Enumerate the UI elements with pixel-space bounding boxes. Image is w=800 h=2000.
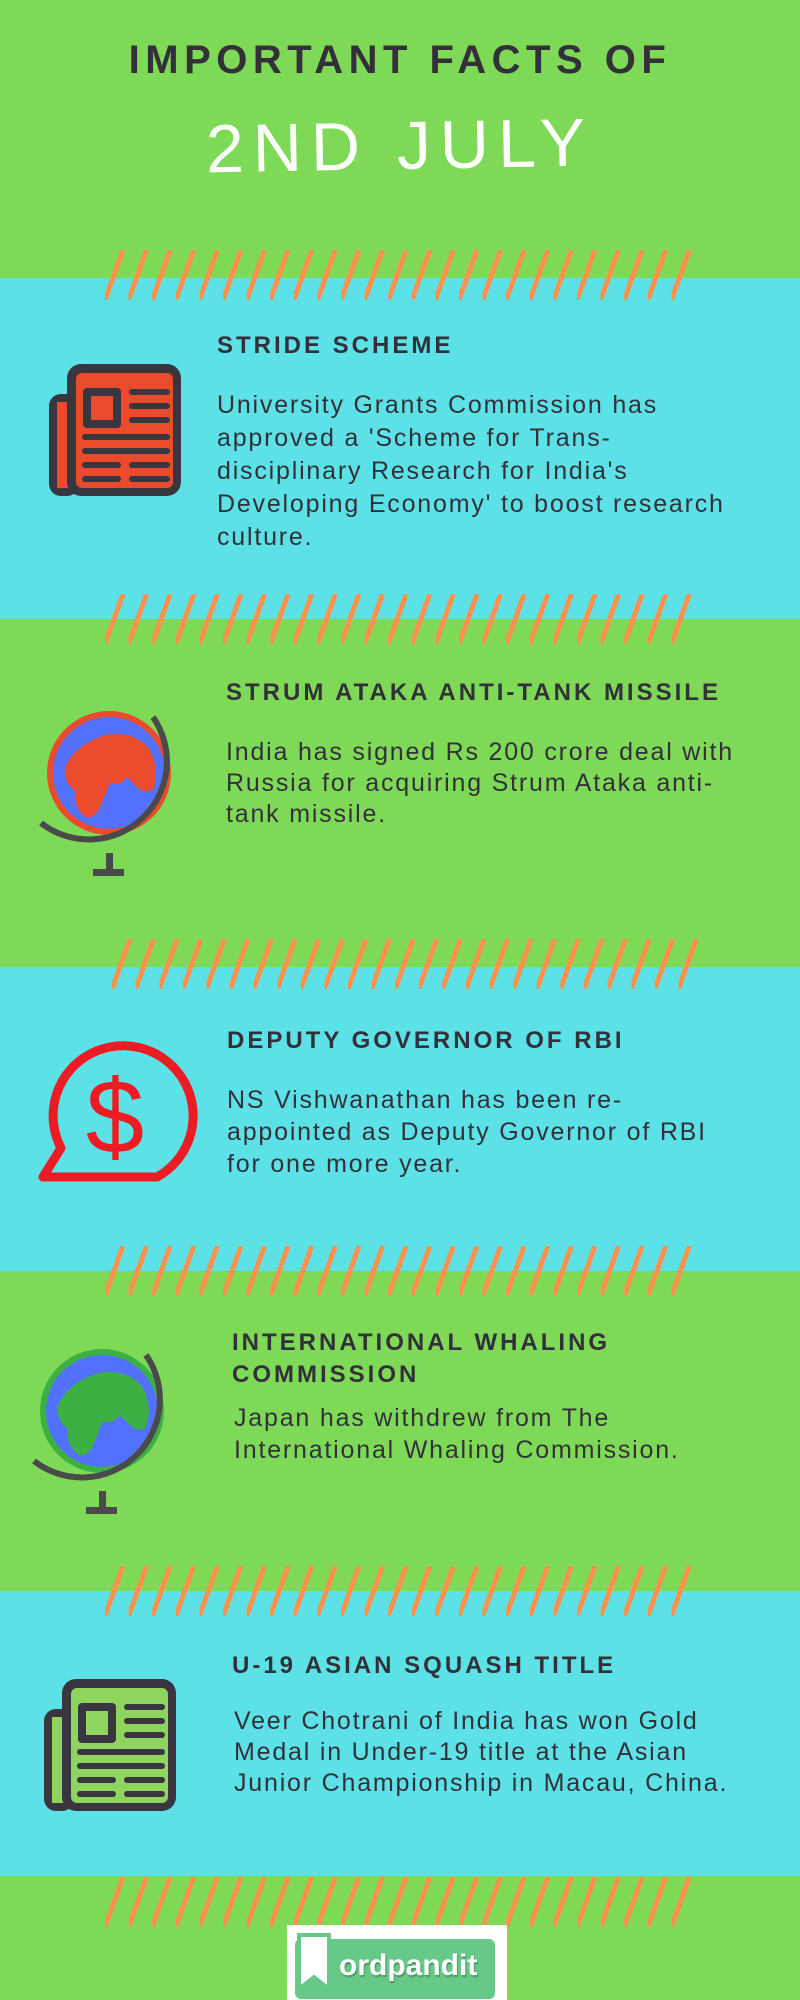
text: squash bbox=[234, 1707, 728, 1797]
text: squash: Veer Chotrani of India has won Gold bbox=[234, 1707, 699, 1735]
text: squash: Medal in Under-19 title at the Asian bbox=[234, 1738, 688, 1766]
section band 4 bbox=[0, 1271, 800, 1591]
icon: dollar bubble bbox=[38, 1041, 198, 1182]
section band 1 bbox=[0, 278, 800, 619]
icon: newspaper red bbox=[49, 364, 181, 496]
logo: wordpandit bbox=[287, 1925, 507, 2000]
heading: stride scheme: STRIDE SCHEME bbox=[217, 332, 453, 359]
text: whaling: Japan has withdrew from The bbox=[234, 1404, 610, 1432]
heading: strum ataka: STRUM ATAKA ANTI-TANK MISSILE bbox=[226, 679, 721, 706]
icon: globe green bbox=[32, 1349, 164, 1514]
heading: whaling: INTERNATIONAL WHALING bbox=[232, 1329, 610, 1356]
icon: globe red bbox=[39, 711, 171, 876]
text: stride: culture. bbox=[217, 523, 313, 551]
text: squash: Junior Championship in Macau, China. bbox=[234, 1769, 728, 1797]
title bbox=[129, 38, 671, 187]
header band bbox=[0, 0, 800, 278]
section band 3 bbox=[0, 967, 800, 1271]
icon: newspaper green bbox=[44, 1679, 176, 1811]
section band 5 bbox=[0, 1591, 800, 1876]
icon: dollar bubble: $ bbox=[86, 1059, 144, 1176]
heading: whaling: COMMISSION bbox=[232, 1361, 419, 1388]
text: rbi: NS Vishwanathan has been re- bbox=[227, 1086, 623, 1114]
text: strum ataka: India has signed Rs 200 crore deal with bbox=[226, 738, 734, 766]
title: 2ND JULY bbox=[205, 105, 595, 187]
text: strum ataka: Russia for acquiring Strum Ataka anti- bbox=[226, 769, 714, 797]
logo: wordpandit: ordpandit bbox=[339, 1949, 477, 1982]
text: stride: disciplinary Research for India's bbox=[217, 457, 629, 485]
text: rbi bbox=[227, 1086, 707, 1178]
text: rbi: for one more year. bbox=[227, 1150, 462, 1178]
section band 2 bbox=[0, 619, 800, 967]
footer band bbox=[0, 1876, 800, 2000]
text: stride: Developing Economy' to boost research bbox=[217, 490, 725, 518]
text: stride: approved a 'Scheme for Trans- bbox=[217, 424, 612, 452]
heading: rbi: DEPUTY GOVERNOR OF RBI bbox=[227, 1027, 625, 1054]
text: stride: University Grants Commission has bbox=[217, 391, 658, 419]
text: strum ataka bbox=[226, 738, 734, 828]
text: whaling: International Whaling Commission. bbox=[234, 1436, 680, 1464]
text: rbi: appointed as Deputy Governor of RBI bbox=[227, 1118, 707, 1146]
text: strum ataka: tank missile. bbox=[226, 800, 387, 828]
text: whaling bbox=[234, 1404, 680, 1464]
heading: whaling bbox=[232, 1329, 610, 1388]
heading: squash: U-19 ASIAN SQUASH TITLE bbox=[232, 1652, 616, 1679]
title: IMPORTANT FACTS OF bbox=[129, 38, 671, 82]
text: stride bbox=[217, 391, 725, 551]
